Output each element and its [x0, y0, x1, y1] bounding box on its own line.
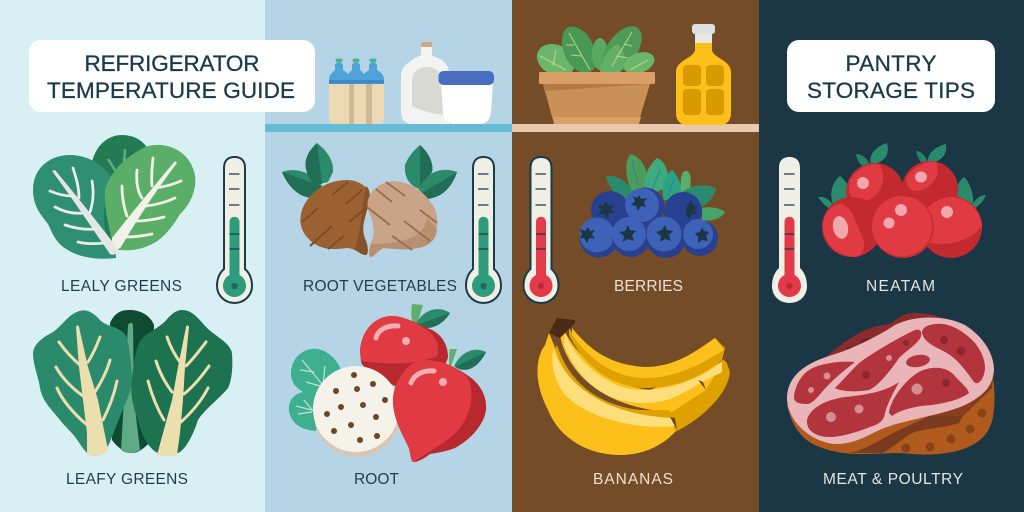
- title: refrigerator temperature guide: TEMPERATURE GUIDE: [47, 78, 295, 103]
- icon: apple, radish and root slice: [289, 304, 486, 462]
- panel: pantry left: [512, 0, 759, 512]
- title: pantry storage tips: STORAGE TIPS: [807, 78, 975, 103]
- title: refrigerator temperature guide: [29, 40, 315, 112]
- thermometer: berries: [524, 157, 558, 303]
- label: root vegetables: ROOT VEGETABLES: [303, 278, 457, 295]
- label: berries: BERRIES: [614, 278, 683, 295]
- icon: meat steak: [787, 313, 994, 454]
- icon: milk jug: [401, 42, 449, 124]
- label: leafy greens: LEAFY GREENS: [66, 471, 188, 488]
- label: meat and poultry: MEAT & POULTRY: [823, 471, 963, 488]
- thermometer: lealy greens: [217, 157, 252, 303]
- shelf: pantry: [512, 124, 759, 132]
- label: neatam: NEATAM: [866, 278, 935, 295]
- panel: refrigerator right: [265, 0, 512, 512]
- title: refrigerator temperature guide: REFRIGERATOR: [84, 51, 260, 76]
- label: bananas: BANANAS: [593, 471, 673, 488]
- icon: bananas: [537, 318, 730, 455]
- icon: root vegetables: [282, 143, 457, 257]
- icon: potted greens: [532, 19, 657, 124]
- icon: food container: [438, 71, 494, 124]
- title: pantry storage tips: [787, 40, 995, 112]
- icon: lealy greens: [33, 135, 195, 259]
- label: lealy greens: LEALY GREENS: [61, 278, 182, 295]
- icon: oil bottle: [676, 24, 731, 125]
- thermometer: root vegetables: [466, 157, 501, 303]
- icon: water bottles: [329, 58, 384, 124]
- label: root: ROOT: [354, 471, 400, 488]
- panel: pantry right: [759, 0, 1024, 512]
- shelf: refrigerator: [265, 124, 512, 132]
- icon: berries: [580, 154, 725, 258]
- icon: leafy greens chard: [33, 310, 232, 456]
- icon: tomatoes: [818, 143, 986, 258]
- panel: refrigerator left: [0, 0, 265, 512]
- thermometer: neatam: [772, 157, 807, 303]
- title: pantry storage tips: PANTRY: [846, 51, 936, 76]
